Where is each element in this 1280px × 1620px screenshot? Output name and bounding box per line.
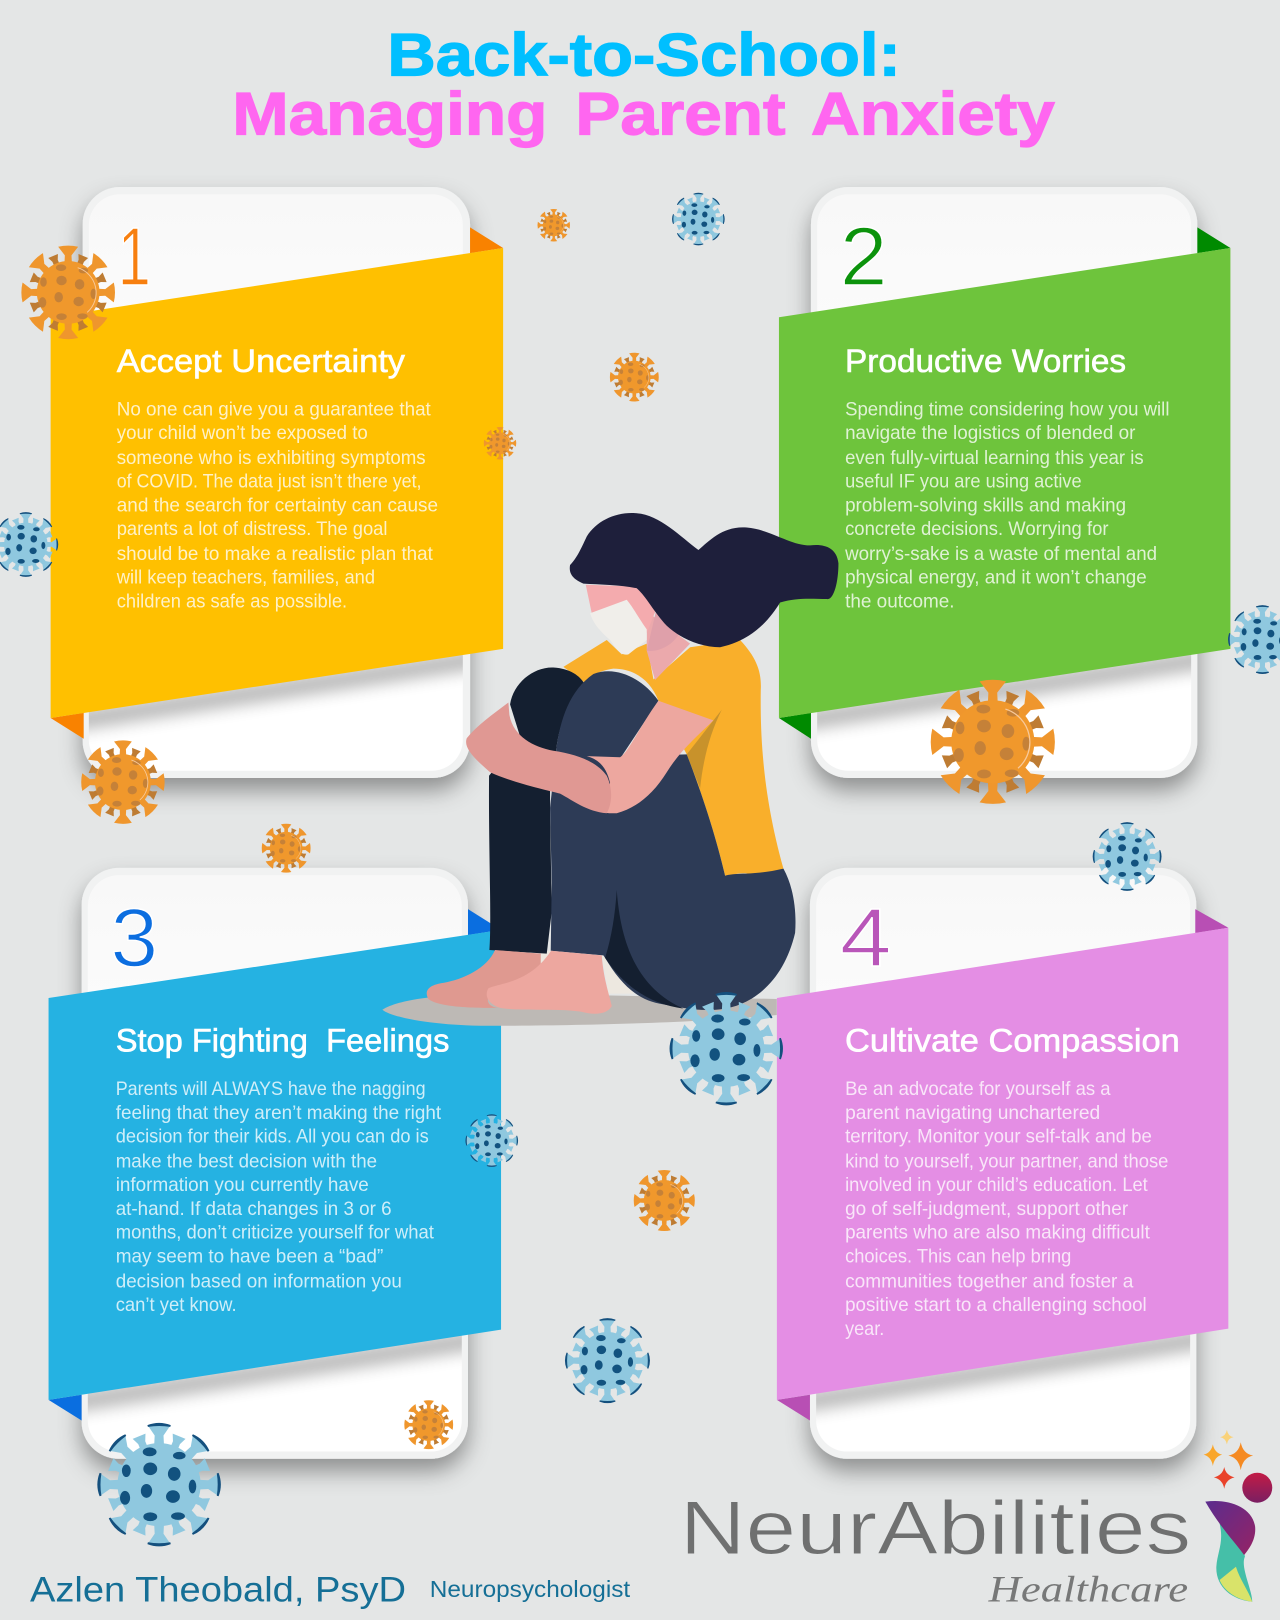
hair bbox=[570, 513, 838, 647]
ribbon folds bbox=[49, 909, 501, 1421]
body text 1: children as safe as possible. bbox=[117, 592, 347, 613]
mask bbox=[590, 600, 647, 655]
body text 4: kind to yourself, your partner, and those bbox=[845, 1151, 1168, 1172]
gap behind feet bbox=[538, 951, 633, 994]
body text 3: make the best decision with the bbox=[116, 1151, 377, 1172]
leg shade bbox=[605, 890, 683, 1009]
body text 3 bbox=[116, 1079, 442, 1316]
far foot bbox=[427, 950, 541, 1008]
ribbon 1 bbox=[51, 248, 503, 718]
title line 2: Managing Parent Anxiety bbox=[232, 80, 1055, 147]
virus orange card 1 bottom bbox=[81, 740, 165, 824]
logo stars bbox=[1204, 1430, 1253, 1489]
heading 3: Stop Fighting Feelings bbox=[116, 1023, 449, 1059]
logo figure bbox=[1205, 1501, 1255, 1602]
body text 4 bbox=[845, 1079, 1168, 1340]
body text 4: Be an advocate for yourself as a bbox=[845, 1079, 1111, 1100]
neck bbox=[647, 611, 690, 680]
body text 3: feeling that they aren’t making the right bbox=[116, 1103, 442, 1124]
number 1: 1 bbox=[118, 210, 151, 303]
ribbon folds bbox=[51, 227, 503, 739]
body text 4: go of self-judgment, support other bbox=[845, 1199, 1129, 1220]
ribbon 3 bbox=[49, 930, 501, 1400]
body text 2: useful IF you are using active bbox=[845, 472, 1082, 493]
body text 2: concrete decisions. Worrying for bbox=[845, 519, 1109, 540]
virus blue bottom left bbox=[98, 1424, 220, 1545]
title line 1: Back-to-School: bbox=[387, 21, 901, 88]
neck shade bbox=[647, 608, 678, 651]
heading 4: Cultivate Compassion bbox=[845, 1023, 1180, 1059]
body text 4: parents who are also making difficult bbox=[845, 1223, 1151, 1244]
face bbox=[586, 585, 657, 633]
ribbon folds bbox=[777, 909, 1228, 1421]
card 3 bbox=[49, 868, 501, 1459]
panel 1: Accept Uncertainty bbox=[51, 187, 503, 778]
card 4 bbox=[777, 868, 1228, 1459]
body text 3: decision based on information you bbox=[116, 1271, 402, 1292]
virus blue left edge bbox=[0, 513, 58, 576]
number 4: 4 bbox=[840, 891, 892, 984]
heading 2: Productive Worries bbox=[845, 343, 1126, 379]
heading 1: Accept Uncertainty bbox=[117, 343, 405, 379]
number 2: 2 bbox=[840, 210, 887, 303]
shirt bbox=[563, 640, 783, 876]
virus blue card 4 top bbox=[1093, 823, 1161, 890]
logo circle bbox=[1242, 1473, 1272, 1503]
body text 4: communities together and foster a bbox=[845, 1271, 1134, 1292]
body text 1: should be to make a realistic plan that bbox=[117, 544, 434, 565]
body text 3: information you currently have bbox=[116, 1175, 369, 1196]
virus blue lower centre bbox=[566, 1319, 649, 1403]
illustration: seated woman with mask bbox=[382, 513, 838, 1026]
logo: NeurAbilities Healthcare bbox=[680, 1430, 1272, 1610]
virus orange card 2 bottom bbox=[931, 680, 1055, 804]
body text 4: territory. Monitor your self-talk and be bbox=[845, 1127, 1152, 1148]
body text 4: positive start to a challenging school bbox=[845, 1295, 1147, 1316]
near arm bbox=[587, 701, 713, 813]
number 3: 3 bbox=[111, 891, 158, 984]
card 2 bbox=[779, 187, 1230, 778]
ribbon folds bbox=[779, 227, 1230, 739]
panel 3: Stop Fighting Feelings bbox=[49, 868, 501, 1459]
body text 1: your child won’t be exposed to bbox=[117, 423, 368, 444]
logo wordmark: NeurAbilities bbox=[680, 1486, 1191, 1571]
body text 1: parents a lot of distress. The goal bbox=[117, 519, 387, 540]
virus blue ribbon 3 edge bbox=[466, 1115, 518, 1167]
body text 3: Parents will ALWAYS have the nagging bbox=[116, 1079, 426, 1100]
virus blue centre large bbox=[670, 993, 782, 1104]
virus orange centre bbox=[610, 353, 659, 402]
body text 4: year. bbox=[845, 1319, 884, 1340]
ribbon 4 bbox=[777, 928, 1228, 1400]
logo subtitle: Healthcare bbox=[987, 1569, 1188, 1610]
body text 2: even fully-virtual learning this year is bbox=[845, 448, 1144, 469]
ribbon 2 bbox=[779, 248, 1230, 718]
card 1 bbox=[51, 187, 503, 778]
body text 2: worry’s-sake is a waste of mental and bbox=[844, 544, 1157, 565]
virus blue right edge bbox=[1229, 606, 1280, 673]
body text 1: No one can give you a guarantee that bbox=[117, 399, 431, 420]
body text 2 bbox=[844, 399, 1169, 613]
body text 1: and the search for certainty can cause bbox=[117, 495, 438, 516]
body text 1: of COVID. The data just isn’t there yet, bbox=[117, 472, 422, 493]
body text 2: the outcome. bbox=[845, 592, 955, 613]
virus orange between cards bbox=[262, 824, 311, 873]
body text 3: at-hand. If data changes in 3 or 6 bbox=[116, 1199, 392, 1220]
near leg bbox=[550, 671, 796, 1010]
virus orange top left bbox=[21, 246, 115, 339]
body text 2: physical energy, and it won’t change bbox=[845, 568, 1147, 589]
virus orange card 3 bottom bbox=[404, 1400, 453, 1449]
body text 2: problem-solving skills and making bbox=[845, 495, 1126, 516]
title bbox=[232, 21, 1055, 147]
body text 3: decision for their kids. All you can do is bbox=[116, 1127, 429, 1148]
virus blue top bbox=[672, 193, 724, 245]
panel 2: Productive Worries bbox=[779, 187, 1230, 778]
body text 4: parent navigating unchartered bbox=[845, 1103, 1100, 1124]
virus orange small ribbon edge bbox=[484, 427, 516, 460]
body text 4: choices. This can help bring bbox=[845, 1246, 1071, 1267]
body text 1: will keep teachers, families, and bbox=[116, 568, 375, 589]
far forearm bbox=[466, 703, 611, 813]
body text 2: navigate the logistics of blended or bbox=[845, 423, 1136, 444]
far leg bbox=[489, 668, 585, 954]
body text 4: involved in your child’s education. Let bbox=[845, 1175, 1148, 1196]
body text 3: may seem to have been a “bad” bbox=[116, 1246, 383, 1267]
author name: Azlen Theobald, PsyD bbox=[30, 1570, 406, 1609]
body text 1 bbox=[116, 399, 438, 613]
panel 4: Cultivate Compassion bbox=[777, 868, 1228, 1459]
body text 3: can’t yet know. bbox=[116, 1295, 237, 1316]
shirt shadow bbox=[687, 710, 722, 788]
body text 1: someone who is exhibiting symptoms bbox=[117, 448, 426, 469]
body text 2: Spending time considering how you will bbox=[845, 399, 1169, 420]
virus orange small top bbox=[537, 209, 570, 242]
floor shadow bbox=[382, 994, 777, 1026]
virus orange lower centre bbox=[634, 1170, 695, 1231]
author role: Neuropsychologist bbox=[430, 1576, 631, 1602]
near foot bbox=[487, 951, 612, 1014]
body text 3: months, don’t criticize yourself for what bbox=[116, 1223, 435, 1244]
